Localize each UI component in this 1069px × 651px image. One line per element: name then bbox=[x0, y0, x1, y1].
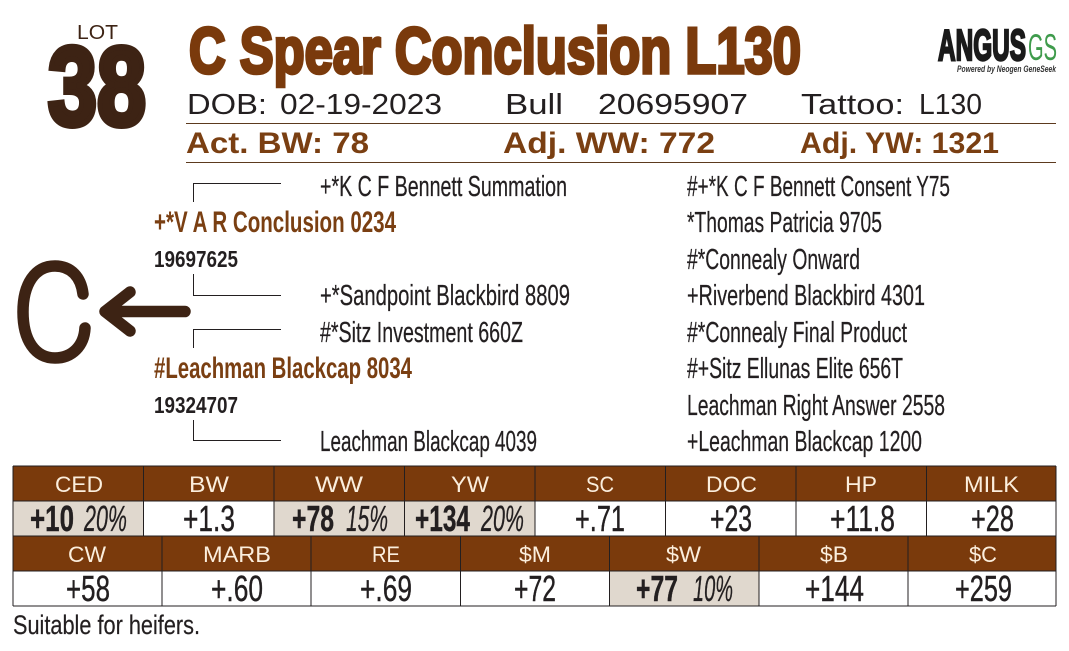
EPD table: second row: MARB bbox=[203, 542, 271, 567]
EPD table: first row: 20% bbox=[480, 498, 524, 539]
icon: C with arrow bbox=[23, 266, 185, 358]
EPD table: second row: +77 bbox=[636, 568, 678, 609]
pedigree: sire side: +*V A R Conclusion 0234 bbox=[154, 206, 396, 239]
footnote: Suitable for heifers. bbox=[13, 610, 200, 640]
EPD table: first row: +.71 bbox=[575, 498, 625, 539]
lot label: LOT bbox=[77, 22, 118, 44]
EPD table: second row: +.60 bbox=[211, 568, 263, 609]
pedigree: sire side: +*Sandpoint Blackbird 8809 bbox=[320, 280, 570, 312]
pedigree: sire side: +*K C F Bennett Summation bbox=[320, 171, 567, 203]
EPD table: first row: +1.3 bbox=[183, 498, 235, 539]
pedigree: dam side: Leachman Blackcap 4039 bbox=[320, 426, 537, 458]
EPD table: first row: 15% bbox=[346, 498, 388, 539]
EPD table: first row: HP bbox=[845, 472, 877, 497]
EPD table: second row: $M bbox=[519, 542, 551, 567]
EPD table: first row: +11.8 bbox=[830, 498, 895, 539]
pedigree: third generation column: Leachman Right Answer 2558 bbox=[687, 390, 945, 422]
EPD table: first row: +78 bbox=[292, 498, 334, 539]
animal info row: Tattoo: bbox=[801, 89, 904, 121]
animal info row: Bull bbox=[505, 89, 563, 121]
lot number: 38 bbox=[48, 25, 146, 149]
EPD table: first row: 20% bbox=[83, 498, 127, 539]
EPD table: second row: +.69 bbox=[360, 568, 412, 609]
animal info row: DOB: bbox=[187, 89, 267, 121]
EPD table: second row: +259 bbox=[955, 568, 1012, 609]
EPD table: first row: YW bbox=[451, 472, 489, 497]
pedigree: dam side bbox=[154, 317, 537, 458]
EPD table: first row: MILK bbox=[964, 472, 1019, 497]
EPD table: second row: CW bbox=[68, 542, 106, 567]
actual and adjusted weights row bbox=[186, 127, 999, 160]
pedigree: dam side: 19324707 bbox=[154, 392, 238, 418]
pedigree: third generation column: +Riverbend Blackbird 4301 bbox=[687, 280, 925, 312]
EPD table: second row: $B bbox=[820, 542, 848, 567]
lot number block bbox=[48, 22, 146, 149]
EPD table: second row: +58 bbox=[66, 568, 110, 609]
EPD table: first row bbox=[13, 466, 1056, 539]
pedigree: third generation column: +Leachman Blackcap 1200 bbox=[687, 426, 922, 458]
pedigree: third generation column bbox=[687, 171, 950, 458]
EPD table: first row: +134 bbox=[415, 498, 470, 539]
EPD table: second row: $W bbox=[666, 542, 701, 567]
EPD table: first row: BW bbox=[189, 472, 229, 497]
EPD table: first row: +28 bbox=[971, 498, 1014, 539]
EPD table: first row: +10 bbox=[30, 498, 74, 539]
EPD table: first row: +23 bbox=[710, 498, 752, 539]
actual and adjusted weights row: Adj. YW: 1321 bbox=[800, 127, 999, 160]
EPD table: second row: +72 bbox=[514, 568, 556, 609]
pedigree: dam side: #Leachman Blackcap 8034 bbox=[154, 352, 412, 385]
pedigree: dam side: #*Sitz Investment 660Z bbox=[320, 317, 523, 349]
EPD table: second row: +144 bbox=[805, 568, 864, 609]
EPD table: first row: SC bbox=[586, 472, 614, 497]
pedigree: third generation column: #*Connealy Onward bbox=[687, 244, 860, 276]
pedigree brackets bbox=[194, 184, 281, 440]
pedigree: third generation column: *Thomas Patricia 9705 bbox=[687, 207, 882, 239]
EPD table: first row: CED bbox=[55, 472, 103, 497]
pedigree: sire side bbox=[154, 171, 570, 312]
EPD table: first row: DOC bbox=[706, 472, 757, 497]
actual and adjusted weights row: Act. BW: 78 bbox=[186, 127, 369, 160]
title: C Spear Conclusion L130 bbox=[189, 14, 801, 87]
EPD table: second row: $C bbox=[969, 542, 997, 567]
EPD table: second row bbox=[13, 501, 1056, 609]
animal info row: 20695907 bbox=[598, 89, 748, 121]
pedigree: sire side: 19697625 bbox=[154, 246, 238, 272]
pedigree: third generation column: #*Connealy Final Product bbox=[687, 317, 907, 349]
EPD table: second row: RE bbox=[372, 542, 400, 567]
animal info row: 02-19-2023 bbox=[280, 89, 442, 121]
actual and adjusted weights row: Adj. WW: 772 bbox=[503, 127, 715, 160]
EPD table: first row: WW bbox=[315, 472, 363, 497]
EPD table: second row: 10% bbox=[693, 568, 733, 609]
pedigree: third generation column: #+Sitz Ellunas Elite 656T bbox=[687, 353, 903, 385]
animal info row bbox=[187, 89, 982, 121]
animal info row: L130 bbox=[919, 89, 982, 121]
